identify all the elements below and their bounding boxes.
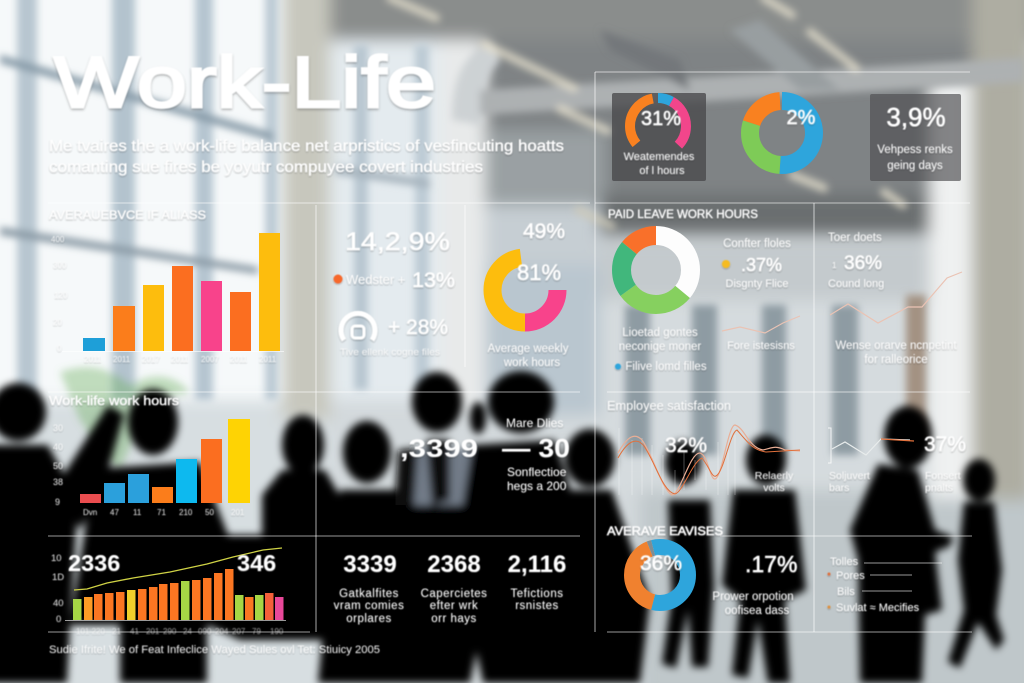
axis labels: 71 — [157, 508, 166, 517]
panel: bottom stats — [334, 551, 566, 625]
heading: AVERAVE EAVISES — [607, 524, 723, 538]
panel: average bar chart — [49, 210, 284, 364]
panel: legend list: Tolles — [830, 556, 859, 568]
big numbers — [68, 550, 276, 576]
panel: paid leave — [608, 209, 800, 373]
panel: trend right: Cound long — [828, 278, 884, 290]
stat column — [334, 551, 404, 625]
stat column: efter wrk — [430, 600, 478, 612]
panel: top stat card 31% — [612, 93, 706, 181]
panel: top donut 2% — [750, 101, 816, 165]
axis labels: 30 — [53, 423, 63, 433]
labels: 36% — [640, 552, 682, 575]
panel: employee satisfaction — [607, 399, 800, 495]
stat column — [508, 551, 566, 612]
axis labels: 11 — [133, 508, 142, 517]
labels: Prower orpotion — [712, 591, 794, 603]
labels: Average weekly — [488, 343, 569, 355]
intro text — [49, 138, 564, 176]
panel: top stat card 3,9%: Vehpess renks — [877, 144, 953, 156]
stat column: 3339 — [343, 551, 397, 578]
axis labels: 210 — [179, 508, 193, 517]
bars — [65, 569, 286, 620]
panel: trend right: 36% — [844, 253, 882, 274]
panel: combo chart — [51, 548, 286, 636]
axis labels: Dvn — [83, 508, 97, 517]
donut captions — [615, 327, 707, 373]
axis labels: 2011 — [84, 355, 102, 364]
axis labels: 38 — [53, 477, 63, 487]
labels: Weatemendes — [624, 151, 695, 163]
stat column: rsnistes — [515, 600, 559, 612]
line chart — [722, 316, 800, 333]
axis labels: 120 — [54, 291, 68, 300]
line — [832, 439, 910, 455]
panel: weekly hours donut — [488, 220, 569, 369]
stat: 14,2,9% — [345, 228, 450, 256]
labels — [640, 551, 797, 617]
axis labels — [51, 235, 277, 364]
panel: average earnings — [607, 524, 797, 617]
panel: combo chart: 207 — [232, 627, 246, 636]
panel: mini line chart 37%: Soljuvert — [829, 470, 870, 482]
donut — [750, 101, 814, 165]
axis labels: 40 — [53, 598, 64, 609]
labels — [624, 108, 695, 177]
axis labels: 50 — [53, 461, 63, 471]
stat row with dot: Wedster + — [346, 272, 405, 287]
heading: AVERAUEBVCE IF ALIASS — [49, 210, 206, 222]
axis labels: 2011 — [171, 355, 189, 364]
donut — [622, 236, 690, 304]
panel: combo chart: 190 — [270, 627, 284, 636]
axis labels: 300 — [53, 261, 67, 270]
stat — [722, 238, 795, 352]
axis labels: 201 — [231, 508, 245, 517]
caption: Tive ellenk cogne files — [340, 347, 440, 358]
labels: work hours — [503, 357, 560, 369]
bars — [80, 419, 250, 503]
panel: combo chart: 201 — [146, 627, 160, 636]
labels: oofisea dass — [725, 605, 790, 617]
panel: trend right: Wense orarve ncnpetint — [835, 340, 957, 352]
panel: mini line chart 37%: bars — [829, 482, 849, 494]
wave chart — [618, 425, 800, 495]
panel: legend list: Bils — [837, 586, 855, 598]
panel: mini line chart 37%: pnalts — [925, 482, 953, 494]
big numbers: 346 — [237, 550, 276, 576]
grid lines — [48, 72, 972, 632]
panel: top stat card 3,9%: 3,9% — [886, 102, 946, 132]
intro text: Me tvaires the a work-life balance net arpristics of vesfincuting hoatts — [49, 138, 564, 155]
axis labels — [51, 553, 64, 625]
stat: 32% — [665, 434, 707, 457]
stat column — [421, 551, 487, 625]
axis labels: 2007 — [201, 355, 219, 364]
intro text: comanting sue fires be yoyutr compuyee covert industries — [49, 159, 483, 176]
donut — [492, 258, 558, 322]
panel: mini line chart 37% — [828, 428, 966, 494]
donut — [630, 98, 686, 154]
label: 2% — [787, 107, 816, 129]
axis labels: 50 — [205, 508, 214, 517]
icon: gauge — [341, 313, 375, 340]
label — [755, 470, 794, 494]
donut captions: neconige moner — [619, 341, 701, 353]
panel: mini line chart 37%: Fonsert — [925, 470, 961, 482]
axis labels: 2011 — [113, 355, 131, 364]
labels — [488, 220, 569, 369]
axis labels: 9 — [55, 497, 60, 507]
silhouettes: office workers — [0, 371, 1004, 683]
panel: center middle stat — [400, 416, 570, 493]
labels: 81% — [517, 260, 561, 285]
bars — [62, 233, 284, 352]
axis labels: 2017 — [142, 355, 160, 364]
panel: legend list: Suvlat ≈ Mecifies — [836, 602, 920, 614]
panel: top stat card 3,9% — [870, 94, 961, 181]
heading: PAID LEAVE WORK HOURS — [608, 209, 758, 221]
panel: combo chart: 41 — [130, 627, 139, 636]
stat column: Gatkalfites — [339, 588, 399, 600]
axis labels: 10 — [51, 553, 62, 564]
axis labels — [53, 423, 245, 517]
axis labels: 2011 — [259, 355, 277, 364]
stat: + 28% — [388, 316, 448, 339]
stat column: Capercietes — [421, 588, 487, 600]
panel: legend list: Pores — [836, 570, 865, 582]
stat: .37% — [741, 255, 782, 275]
axis labels: 20 — [53, 318, 62, 327]
stat row with dot — [334, 269, 455, 292]
axis labels: 47 — [110, 508, 119, 517]
stat column: 2368 — [427, 551, 481, 578]
big numbers: 2336 — [68, 550, 120, 576]
axis labels: 400 — [51, 235, 65, 244]
donut captions: Filive lomd filles — [625, 361, 707, 373]
axis labels: 0 — [56, 614, 61, 625]
stat column: Tefictions — [511, 588, 563, 600]
panel: combo chart: 101 220 — [76, 627, 105, 636]
stat text: Sonflectioe — [507, 465, 567, 479]
panel: combo chart: 290 — [163, 627, 177, 636]
panel: trend right: for ralleorice — [864, 354, 928, 366]
stat: ,3399 — [400, 435, 478, 463]
heading: Work-life work hours — [49, 394, 179, 408]
panel: combo chart: 79 — [252, 627, 261, 636]
panel: top stat card 3,9%: geing days — [887, 160, 943, 172]
labels: 49% — [523, 220, 565, 243]
heading: Employee satisfaction — [607, 399, 731, 413]
donut captions: Lioetad gontes — [622, 327, 698, 339]
line chart — [830, 272, 962, 323]
panel: center stats — [334, 228, 455, 358]
panel: combo chart: 090 — [198, 627, 212, 636]
axis labels: 0 — [57, 344, 62, 353]
stat: — 30 — [502, 433, 570, 463]
stat text: Mare Dlies — [506, 416, 563, 430]
stat: Confter floles — [723, 238, 791, 250]
panel: combo chart: 204 — [215, 627, 229, 636]
stat: Disgnty Flice — [726, 278, 788, 290]
panel: trend right: Toer doets — [828, 232, 882, 244]
label: Relaerly — [755, 470, 794, 482]
stat column: orplares — [346, 613, 392, 625]
panel: combo chart: 21 — [112, 627, 121, 636]
labels: of l hours — [639, 165, 685, 177]
trend line — [74, 548, 282, 590]
panel: trend right: 1 — [832, 261, 837, 270]
stat column: vram comies — [334, 600, 404, 612]
panel: combo chart: 24 — [183, 627, 192, 636]
donut — [632, 547, 688, 603]
label: volts — [763, 482, 785, 494]
stat: 37% — [924, 433, 966, 456]
stat: Fore istesisns — [727, 340, 795, 352]
labels: 31% — [641, 108, 681, 130]
panel: center middle stat: hegs a 200 — [507, 479, 567, 493]
panel: legend list — [828, 556, 942, 614]
panel: work-life hours bar chart — [49, 394, 250, 517]
stat row with dot: 13% — [412, 269, 455, 292]
source line: Sudie Ifrite! We of Feat Infeclice Wayed Sules ovl Tet: Stiuicy 2005 — [49, 644, 380, 656]
axis labels: 1D — [52, 572, 64, 583]
axis labels: 40 — [53, 442, 63, 452]
stat column: 2,116 — [508, 551, 566, 578]
panel: trend right — [828, 232, 962, 366]
axis labels: 2011 — [230, 355, 248, 364]
labels: .17% — [745, 551, 797, 577]
title: Work-Life — [54, 43, 436, 123]
stat column: orr hays — [431, 613, 477, 625]
